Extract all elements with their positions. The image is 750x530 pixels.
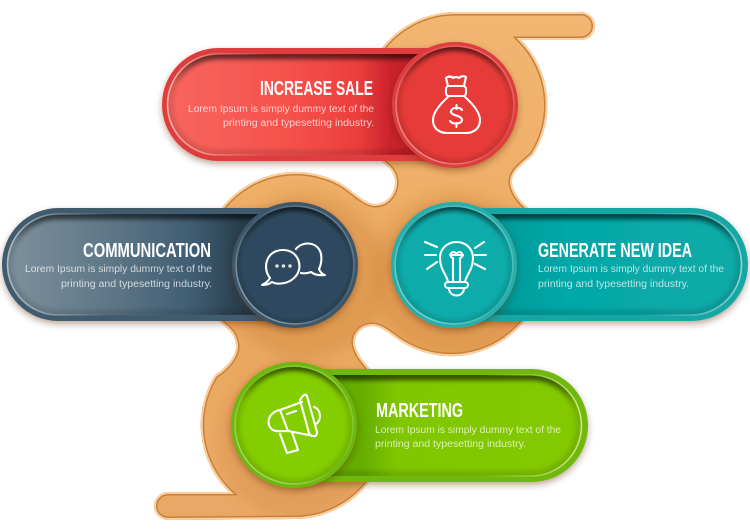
pill: increase sale xyxy=(162,48,455,161)
icon: megaphone xyxy=(269,395,320,453)
orange connector shape xyxy=(154,12,595,520)
heading: communication: COMMUNICATION xyxy=(83,240,211,262)
icon: money bag xyxy=(433,76,480,133)
badge circle: generate new idea xyxy=(391,202,517,328)
heading: marketing: MARKETING xyxy=(376,400,463,422)
text block: communication xyxy=(25,264,212,290)
text block: marketing: printing and typesetting industry. xyxy=(375,439,526,450)
badge circle: communication xyxy=(232,202,358,328)
panel: marketing xyxy=(231,362,588,488)
icon: light bulb xyxy=(425,242,486,296)
pill: generate new idea xyxy=(454,208,748,321)
panel: increase sale xyxy=(162,42,518,168)
text block: communication: Lorem Ipsum is simply dummy text of the xyxy=(25,264,212,275)
text block: increase sale: printing and typesetting industry. xyxy=(223,118,374,129)
pill: marketing xyxy=(294,369,588,482)
panel: generate new idea xyxy=(391,202,748,328)
text block: increase sale: Lorem Ipsum is simply dummy text of the xyxy=(188,104,374,115)
text block: generate new idea xyxy=(538,264,724,290)
text block: marketing xyxy=(375,425,561,450)
text block: marketing: Lorem Ipsum is simply dummy text of the xyxy=(375,425,561,436)
icon: speech bubbles xyxy=(262,244,325,285)
pill: communication xyxy=(2,208,295,321)
badge circle: marketing xyxy=(231,362,357,488)
text block: generate new idea: Lorem Ipsum is simply dummy text of the xyxy=(538,264,724,275)
text block: communication: printing and typesetting industry. xyxy=(61,279,212,290)
heading: increase sale: INCREASE SALE xyxy=(260,78,373,100)
heading: generate new idea: GENERATE NEW IDEA xyxy=(538,240,692,262)
text block: increase sale xyxy=(188,104,374,129)
badge circle: increase sale xyxy=(392,42,518,168)
panel: communication xyxy=(2,202,358,328)
text block: generate new idea: printing and typesetting industry. xyxy=(538,279,689,290)
